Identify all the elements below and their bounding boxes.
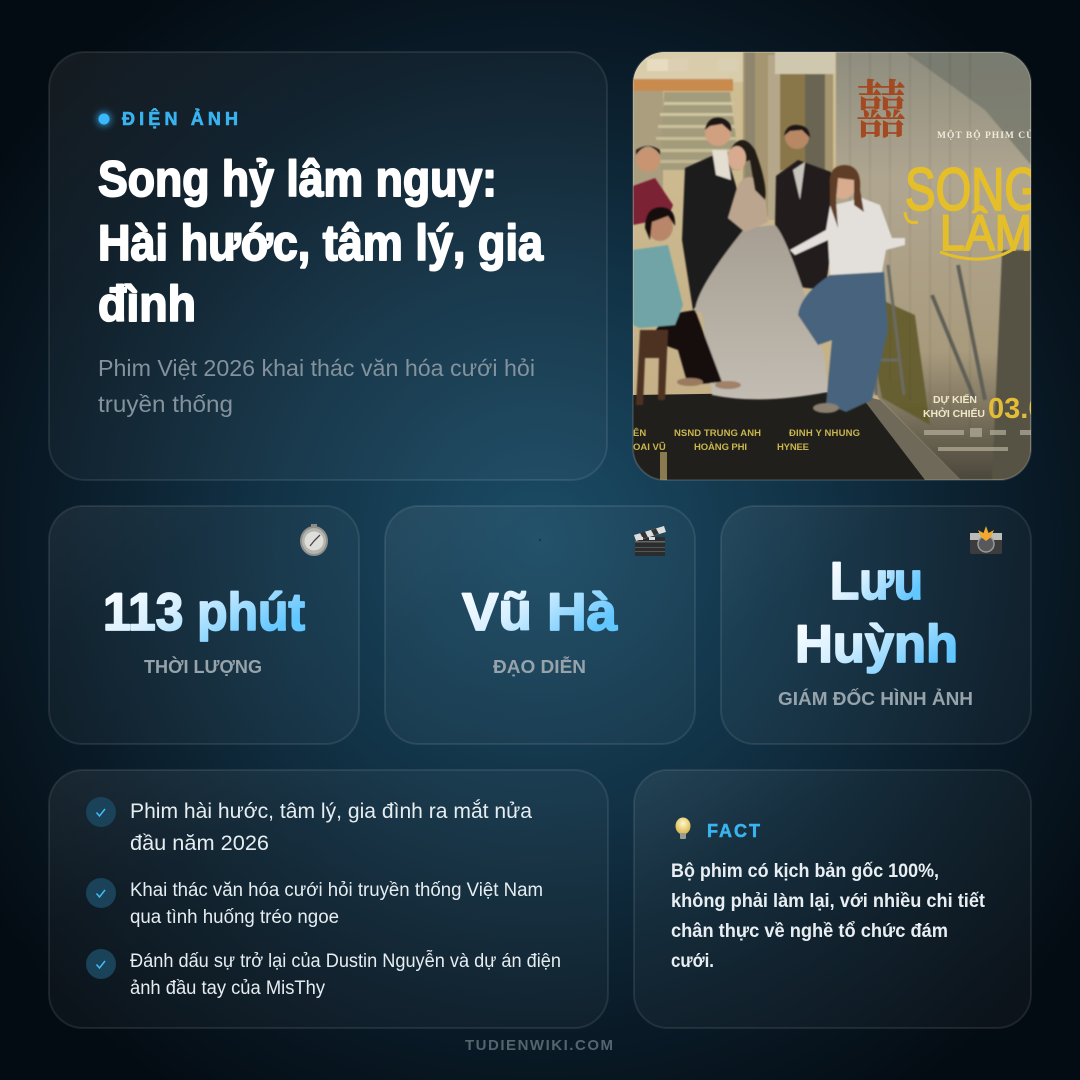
poster: cast names: ÊN: [633, 427, 646, 439]
fact text: [671, 861, 986, 972]
poster: film logo: [904, 166, 1031, 261]
point 2: Khai thác văn hóa cưới hỏi truyền thống Việt Nam: [130, 880, 543, 901]
poster: groom: [682, 118, 745, 310]
poster: cast names: HYNEE: [777, 442, 809, 453]
movie poster: [633, 52, 1044, 480]
poster: release date: 03.0: [988, 393, 1044, 425]
title: Song hỷ lâm nguy:: [98, 151, 497, 207]
poster: wall: [836, 52, 1031, 480]
point 3: Đánh dấu sự trở lại của Dustin Nguyễn và dự án điện: [130, 950, 561, 972]
fact text: cưới.: [671, 951, 714, 972]
panel: duration: [49, 506, 359, 744]
icon: stopwatch: [301, 524, 327, 555]
poster: release date: DỰ KIẾN: [933, 393, 977, 406]
poster: alley and stairs: [633, 52, 835, 220]
fact text: chân thực về nghề tổ chức đám: [671, 921, 948, 942]
poster: bride: [695, 140, 828, 399]
poster: sponsor logos: [924, 428, 1031, 451]
point 1: [86, 797, 532, 855]
stat value: Huỳnh: [795, 615, 958, 674]
poster: film logo: SONG: [905, 156, 1040, 223]
stat label: GIÁM ĐỐC HÌNH ẢNH: [778, 688, 973, 709]
poster: film logo: LÂM: [940, 205, 1032, 261]
point 3: ảnh đầu tay của MisThy: [130, 978, 325, 999]
poster: ground: [633, 392, 950, 480]
poster: cast names: [633, 428, 860, 450]
poster: cast names: HOÀNG PHI: [694, 442, 747, 453]
stat value: [795, 552, 958, 674]
poster: stool: [876, 265, 904, 395]
stat label: THỜI LƯỢNG: [144, 656, 262, 677]
poster: people: [633, 118, 905, 413]
icon: clapperboard: [634, 526, 666, 556]
icon: camera with flash: [970, 526, 1002, 554]
poster: man in red: [633, 146, 673, 225]
fact heading: FACT: [707, 821, 760, 841]
point 2: qua tình huống tréo ngoe: [130, 907, 339, 928]
poster: woman in white shirt: [790, 165, 905, 413]
point 2: [86, 878, 543, 928]
poster: cast names: ĐINH Y NHUNG: [789, 428, 860, 439]
panel: key points: [49, 770, 608, 1028]
subtitle: truyền thống: [98, 391, 233, 417]
title: đình: [98, 276, 196, 332]
poster: double happiness sign: 囍: [856, 61, 906, 151]
icon: light bulb: [676, 818, 690, 839]
stat label: ĐẠO DIỄN: [493, 656, 586, 677]
poster: small caption: MỘT BỘ PHIM CỦA: [937, 128, 1042, 141]
fact text: Bộ phim có kịch bản gốc 100%,: [671, 861, 939, 882]
stat value: Lưu: [830, 552, 923, 611]
stat value: Vũ Hà: [462, 583, 618, 642]
poster: cast names: NSND TRUNG ANH: [674, 428, 761, 439]
panel: fact: [634, 770, 1031, 1028]
panel: director: [385, 506, 695, 744]
category tag: ĐIỆN ẢNH: [122, 108, 238, 129]
subtitle: [98, 355, 535, 417]
poster: release date: KHỞI CHIẾU: [923, 407, 985, 420]
footer source: TUDIENWIKI.COM: [465, 1037, 613, 1054]
poster: woman in teal: [633, 207, 741, 405]
title: [98, 151, 544, 332]
subtitle: Phim Việt 2026 khai thác văn hóa cưới hỏi: [98, 355, 535, 381]
title: Hài hước, tâm lý, gia: [98, 215, 544, 271]
poster: older man: [775, 125, 833, 290]
point 3: [86, 949, 561, 999]
fact text: không phải làm lại, với nhiều chi tiết: [671, 891, 986, 912]
poster frame: [633, 52, 1031, 480]
poster: cast names: OAI VŨ: [633, 442, 666, 453]
poster: release date: [924, 394, 1031, 418]
point 1: Phim hài hước, tâm lý, gia đình ra mắt nửa: [130, 800, 532, 823]
point 1: đầu năm 2026: [130, 832, 269, 855]
panel: headline: [49, 52, 607, 480]
panel: cinematographer: [721, 506, 1031, 744]
stat value: 113 phút: [103, 583, 305, 642]
